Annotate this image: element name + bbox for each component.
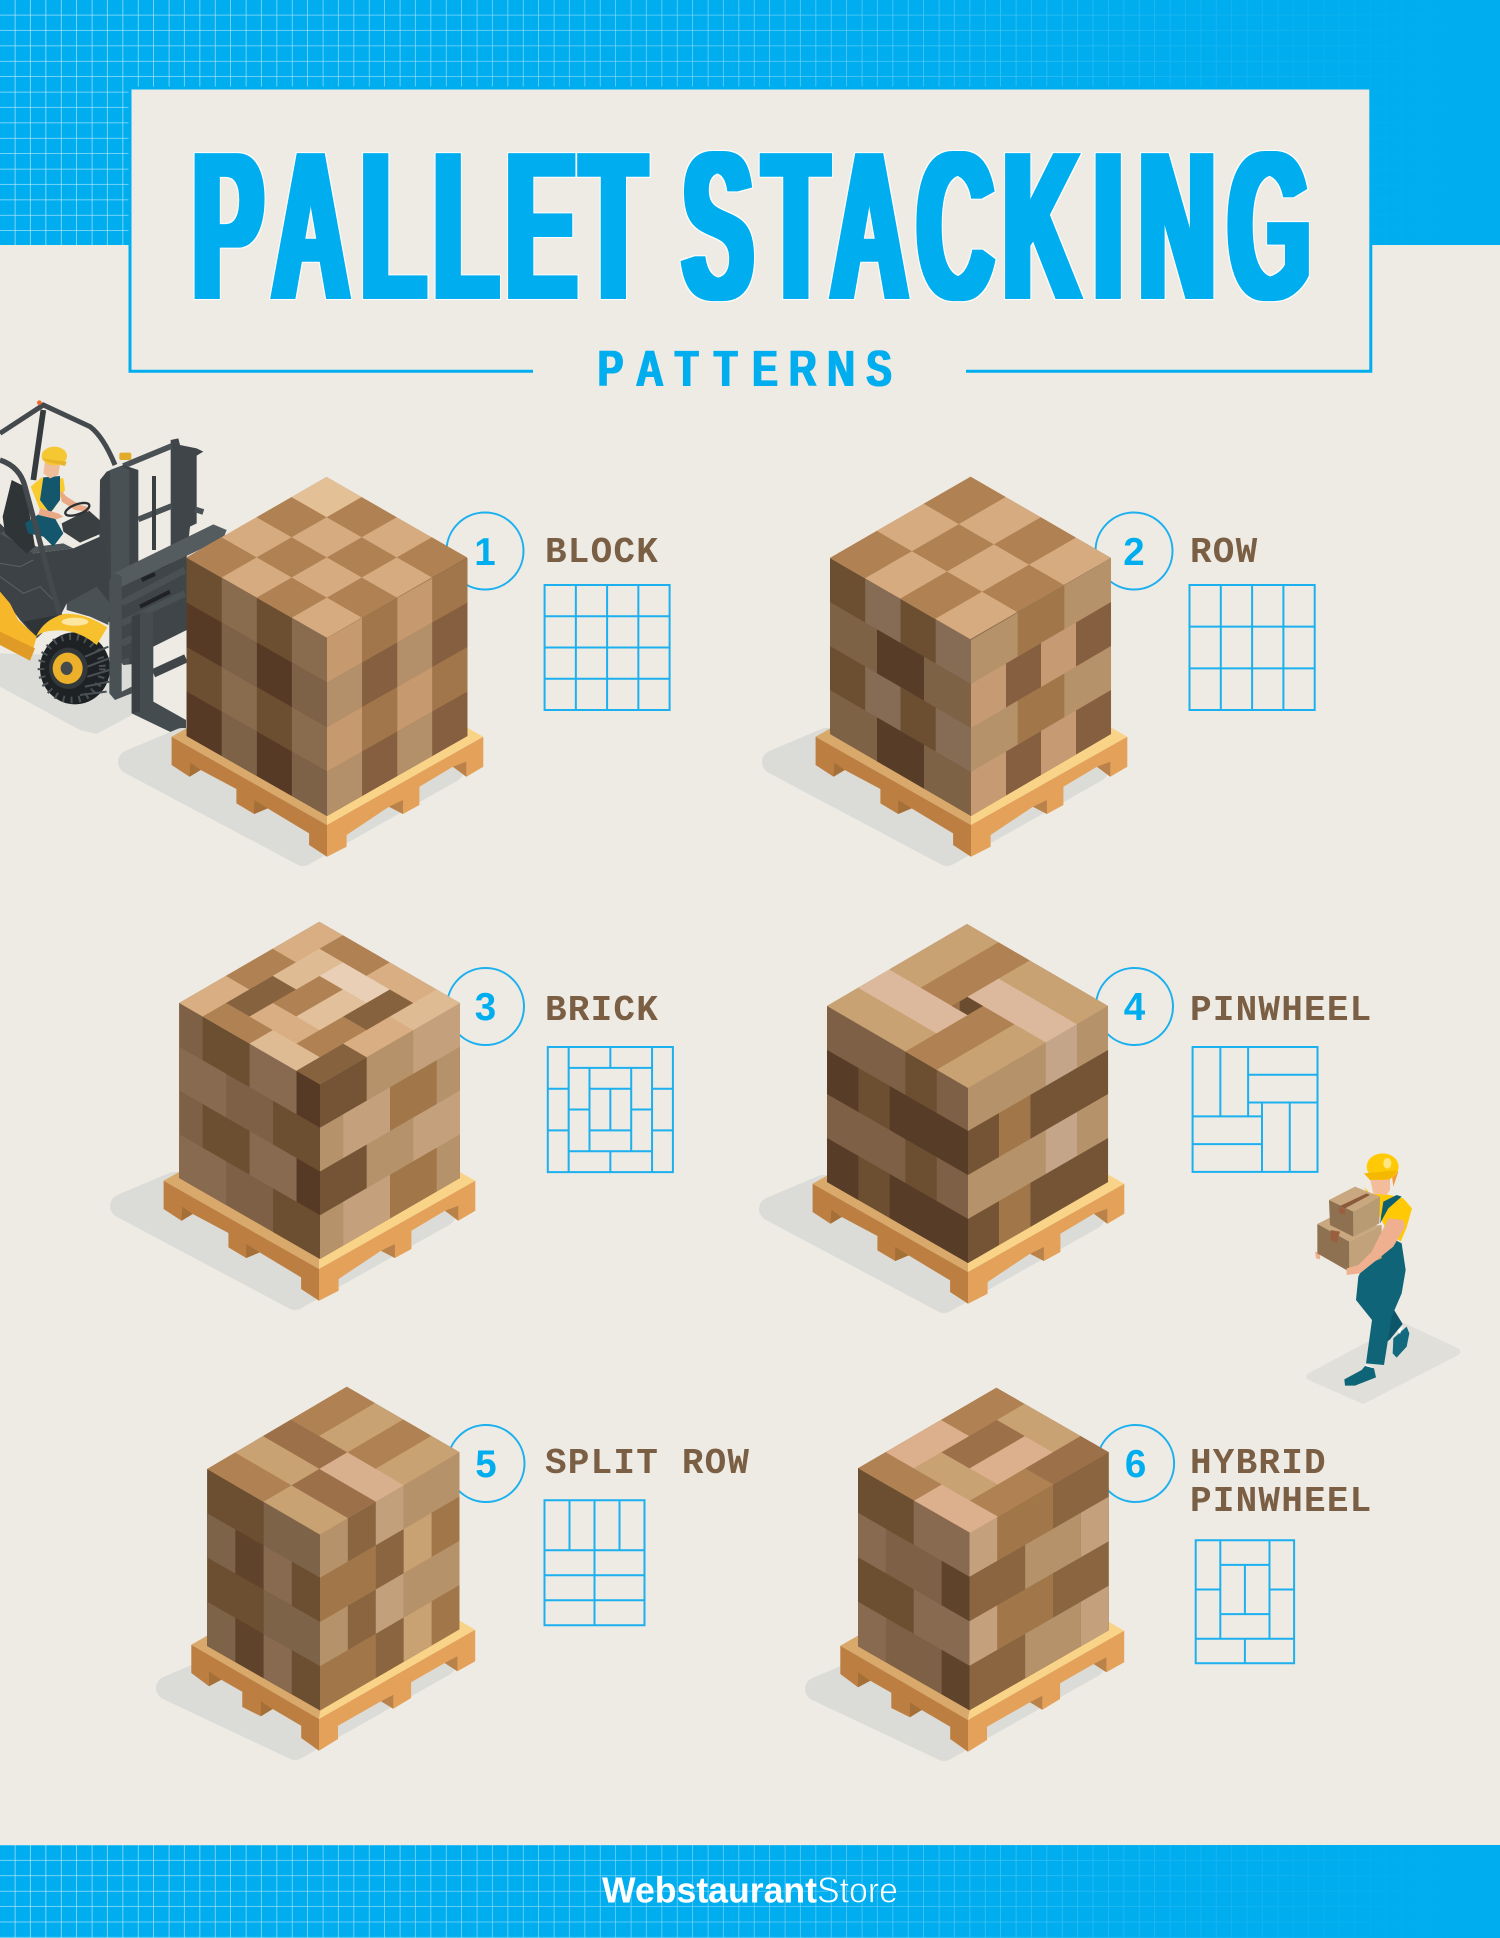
wooden pallet 5: [168, 1555, 475, 1751]
left face 1: [187, 558, 327, 816]
wooden pallet 2: [774, 648, 1127, 857]
label: hybrid pinwheel: HYBRID: [1190, 1443, 1327, 1484]
top face 4: [827, 924, 1108, 1088]
number 2: 2: [1123, 531, 1145, 574]
diagram: row: [1190, 585, 1315, 710]
left face 3: [179, 1003, 320, 1259]
subtitle: PATTERNS: [598, 340, 892, 397]
pallet stack 1: block: [130, 477, 483, 857]
right face 4: [968, 1006, 1108, 1263]
stack silhouette 5: [207, 1387, 460, 1710]
top face 2: [830, 477, 1111, 639]
forklift with driver: [0, 400, 227, 734]
wooden pallet 1: [130, 648, 483, 857]
diagram: brick: [548, 1047, 673, 1172]
stack silhouette 6: [858, 1388, 1109, 1710]
title: PALLET STACKING: [192, 107, 1310, 345]
pallet stack 5: split row: [168, 1387, 475, 1751]
label: brick: BRICK: [545, 990, 659, 1031]
right face 2: [971, 558, 1111, 816]
label: block: BLOCK: [545, 532, 659, 573]
number 6: 6: [1125, 1443, 1146, 1486]
stack silhouette 4: [827, 924, 1108, 1263]
footer logo: Store: [817, 1870, 898, 1910]
wooden pallet 4: [771, 1095, 1124, 1304]
number 3: 3: [475, 986, 496, 1029]
footer band with grid: [0, 1845, 1500, 1938]
left face 2: [830, 558, 971, 816]
title frame: [130, 88, 1371, 390]
badge circles: [446, 512, 1174, 1502]
label: pinwheel: PINWHEEL: [1190, 990, 1372, 1031]
stack silhouette 2: [830, 477, 1111, 816]
diagram: pinwheel: [1193, 1047, 1318, 1172]
number 4: 4: [1124, 986, 1146, 1029]
right face 5: [320, 1452, 460, 1710]
left face 4: [827, 1006, 968, 1263]
wooden pallet 3: [122, 1092, 475, 1301]
left face 6: [858, 1468, 970, 1710]
stack silhouette 3: [179, 922, 460, 1259]
diagram: block: [545, 585, 670, 710]
header band with grid: [0, 0, 1500, 245]
label: hybrid pinwheel: PINWHEEL: [1190, 1481, 1372, 1522]
diagram: hybrid pinwheel: [1196, 1540, 1294, 1663]
right face 1: [327, 558, 467, 816]
left face 5: [207, 1469, 320, 1710]
top face 1: [186, 477, 467, 638]
pallet stack 6: hybrid pinwheel: [817, 1388, 1124, 1752]
pallet stack 2: row: [774, 477, 1127, 857]
diagram: split row: [544, 1500, 644, 1625]
right face 6: [970, 1452, 1109, 1710]
top face 5: [207, 1387, 460, 1535]
wooden pallet 6: [817, 1556, 1124, 1752]
footer logo: Webstaurant: [602, 1870, 817, 1910]
worker carrying boxes: [1310, 1153, 1457, 1400]
right face 3: [320, 1003, 460, 1259]
label: row: ROW: [1190, 532, 1258, 573]
number 5: 5: [475, 1443, 497, 1486]
number 1: 1: [474, 531, 496, 574]
stack silhouette 1: [187, 477, 467, 816]
pallet stack 4: pinwheel: [771, 924, 1124, 1304]
top face 6: [858, 1388, 1109, 1533]
top face 3: [179, 922, 460, 1084]
pallet stack 3: brick: [122, 922, 475, 1301]
label: split row: SPLIT ROW: [545, 1443, 750, 1484]
